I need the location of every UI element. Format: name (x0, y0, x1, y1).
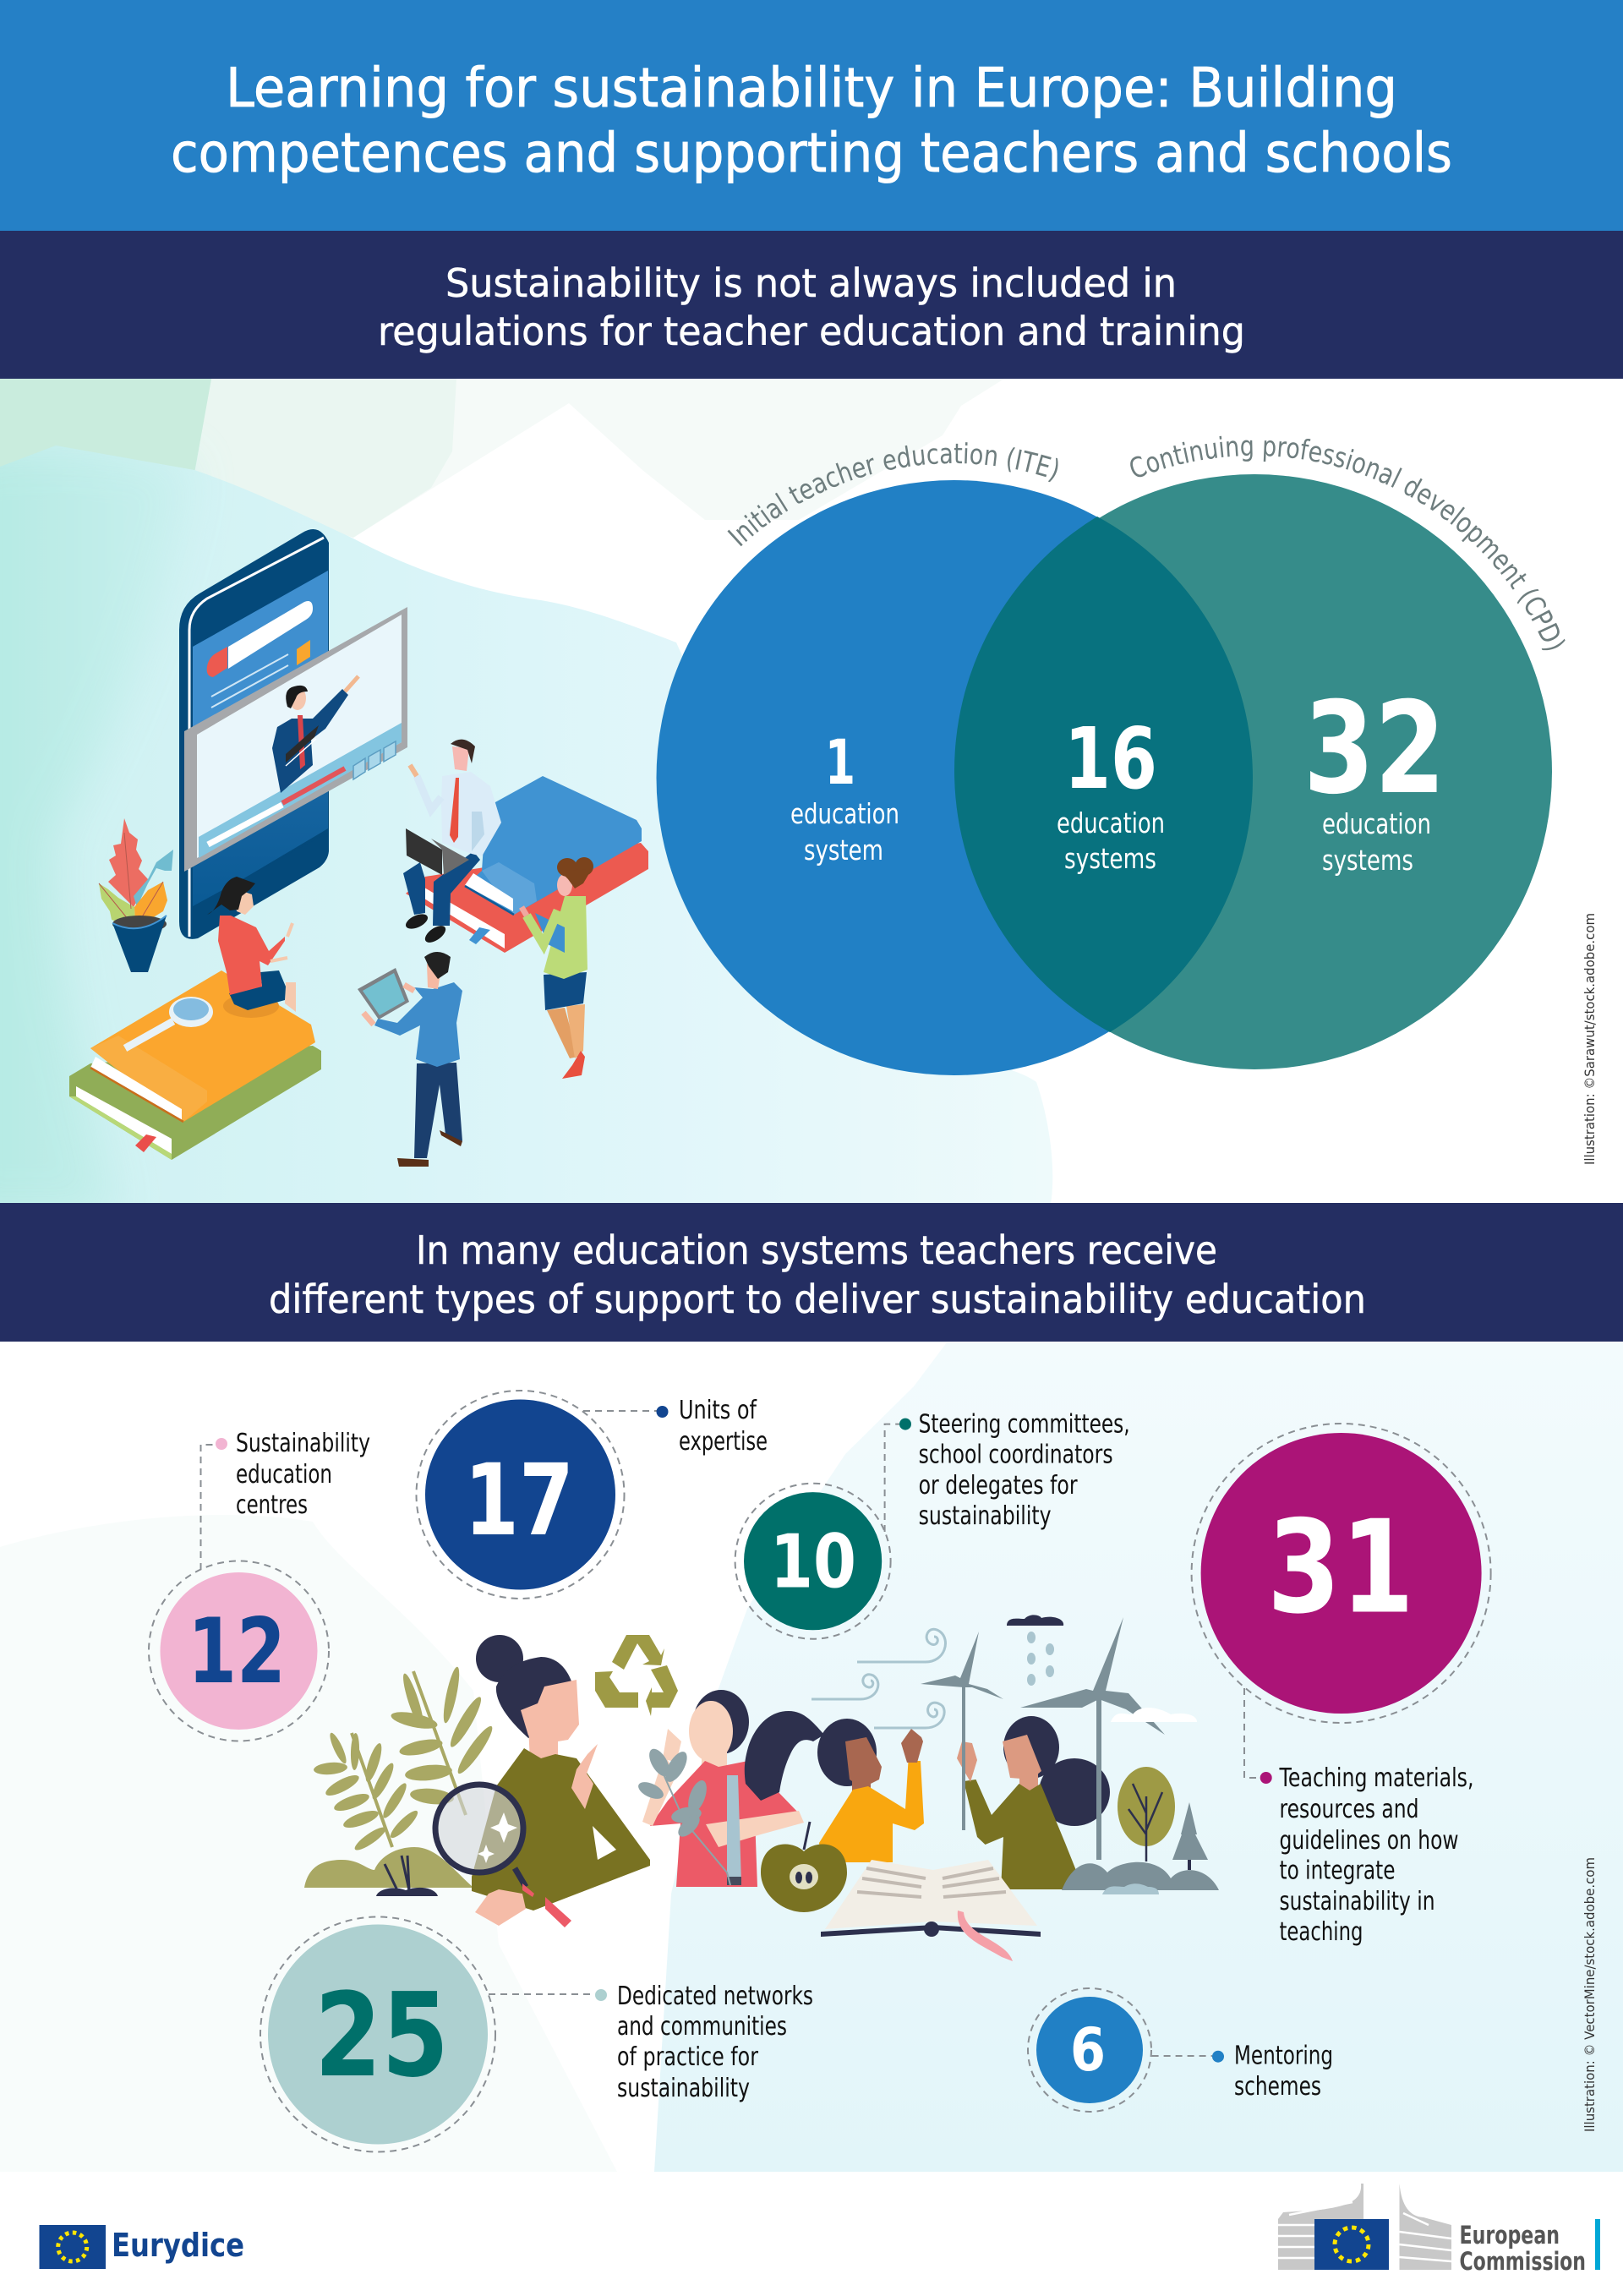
credit: lower illustration: Illustration: © VectorMine/stock.adobe.com (1582, 1857, 1598, 2132)
figure: woman in green (522, 857, 593, 1079)
stat: 10 steering committees (735, 1410, 1130, 1639)
stat: 17 units of expertise: 17 (464, 1442, 574, 1558)
hills and plants, left (304, 1665, 496, 1896)
icon: recycling symbol (595, 1635, 678, 1716)
icon: open book with ribbon (821, 1860, 1041, 1961)
figure: man with tablet (358, 952, 462, 1167)
heading band: support: different types of support to deliver sustainability education (269, 1276, 1366, 1322)
heading band: support (0, 1203, 1623, 1342)
wind swirls (812, 1629, 945, 1728)
stat: 25 dedicated networks (260, 1917, 813, 2152)
panel: support section background (0, 1342, 1623, 2172)
wind turbines (921, 1617, 1165, 1860)
heading band: regulations: regulations for teacher education and training (378, 309, 1245, 354)
circle: initial teacher education (656, 480, 1251, 1075)
overlap of the two circles (954, 517, 1253, 1032)
logo: European Commission: European (1459, 2221, 1560, 2250)
value: CPD only: 32 (1303, 675, 1445, 823)
stat: 12 sustainability education centres (149, 1429, 370, 1741)
heading band: support: In many education systems teachers receive (416, 1227, 1217, 1273)
stat: 31 teaching materials: resources and (1280, 1795, 1418, 1824)
stat: 10 steering committees: sustainability (919, 1501, 1052, 1531)
stat: 17 units of expertise: expertise (679, 1427, 768, 1457)
heading band: regulations (0, 231, 1623, 379)
stat: 31 teaching materials: sustainability in (1280, 1887, 1435, 1916)
stat: 25 dedicated networks: sustainability (617, 2074, 750, 2103)
figure: girl in olive with raised hand (957, 1716, 1110, 1889)
teacher on screen (272, 676, 358, 793)
header: title banner (0, 0, 1623, 231)
stat: 10 steering committees: school coordinators (919, 1440, 1113, 1470)
circle: continuing professional development (957, 474, 1552, 1069)
logo: Eurydice (39, 2225, 244, 2269)
stat: 10 steering committees: Steering committees, (919, 1410, 1130, 1439)
stat: 6 mentoring schemes: schemes (1234, 2072, 1321, 2102)
figure: seated woman in red (207, 877, 296, 1012)
stat: 12 sustainability education centres: centres (236, 1490, 308, 1520)
label: initial teacher education arc: Initial teacher education (ITE) (727, 442, 1058, 546)
stat: 25 dedicated networks: of practice for (617, 2042, 759, 2072)
stat: 12 sustainability education centres: Sustainability (236, 1429, 370, 1458)
illustration: teachers with phone, video and books (69, 529, 648, 1167)
panel: video screen with teacher (184, 607, 407, 872)
stat: 6 mentoring schemes: 6 (1070, 2015, 1106, 2085)
title: Learning for sustainability in Europe: Building (226, 57, 1397, 120)
stat: 31 teaching materials: teaching (1280, 1917, 1363, 1947)
value: ITE only: system (804, 834, 883, 866)
value: ITE only: 1 (825, 727, 855, 799)
icon: rain cloud (1007, 1615, 1063, 1686)
illustration: learners and sustainability scene (304, 1615, 1219, 1961)
title: competences and supporting teachers and schools (171, 123, 1452, 185)
panel: venn section background (0, 379, 1053, 1203)
label: continuing professional development arc: Continuing professional development (CPD) (1130, 436, 1566, 651)
value: both ITE and CPD: education (1057, 806, 1165, 839)
value: CPD only (1303, 675, 1445, 877)
stat: 31 teaching materials: Teaching materials, (1279, 1763, 1474, 1793)
icon: phone (179, 529, 329, 939)
value: ITE only (790, 727, 899, 866)
stat: 31 teaching materials: to integrate (1280, 1856, 1395, 1886)
stat: 31 teaching materials: 31 (1267, 1493, 1414, 1642)
chart: venn diagram (656, 436, 1566, 1075)
credit: upper illustration: Illustration: ©Sarawut/stock.adobe.com (1582, 913, 1598, 1165)
stat: 12 sustainability education centres: 12 (188, 1599, 286, 1703)
stat: 10 steering committees: 10 (770, 1518, 856, 1604)
figure: seated man with laptop (403, 740, 501, 946)
figure: girl with pencil and branch (636, 1690, 804, 1887)
value: ITE only: education (790, 797, 899, 830)
stat: 31 teaching materials (1192, 1424, 1491, 1947)
logo: European Commission: Commission (1459, 2247, 1586, 2276)
stat: 6 mentoring schemes: Mentoring (1234, 2042, 1333, 2071)
figure: woman with magnifying glass (435, 1635, 650, 1927)
trees and hills, right (1062, 1708, 1219, 1894)
figure: red and blue books (406, 776, 648, 953)
heading band: regulations: Sustainability is not always included in (445, 260, 1177, 306)
logo: European Commission (1278, 2184, 1600, 2276)
stat: 17 units of expertise (416, 1391, 768, 1599)
value: both ITE and CPD: systems (1064, 842, 1156, 875)
value: both ITE and CPD: 16 (1064, 709, 1157, 808)
value: CPD only: systems (1322, 844, 1413, 877)
stat: 31 teaching materials: guidelines on how (1280, 1826, 1459, 1856)
value: CPD only: education (1322, 807, 1431, 840)
icon: potted plant (99, 818, 173, 972)
stat: 17 units of expertise: Units of (679, 1396, 757, 1425)
stat: 10 steering committees: or delegates for (919, 1471, 1078, 1501)
value: both ITE and CPD (1057, 709, 1165, 875)
icon: green and orange books with magnifier (69, 970, 321, 1160)
logo: Eurydice: Eurydice (112, 2227, 244, 2264)
stat: 25 dedicated networks: Dedicated networks (617, 1982, 813, 2011)
title (171, 57, 1452, 185)
stat: 6 mentoring schemes (1028, 1988, 1333, 2112)
figure: girl with ponytail and raised hand (745, 1711, 924, 1862)
icon: apple (761, 1822, 847, 1912)
stat: 12 sustainability education centres: education (236, 1460, 332, 1490)
stat: 25 dedicated networks: and communities (617, 2012, 787, 2042)
stat: 25 dedicated networks: 25 (314, 1969, 449, 2103)
